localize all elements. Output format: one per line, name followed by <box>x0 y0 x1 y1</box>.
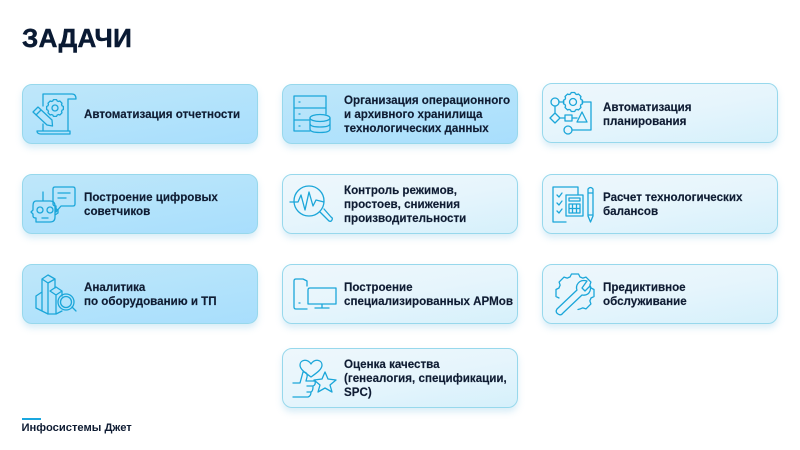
panel: predictive maintenance: обслуживание <box>603 295 687 308</box>
panel: reporting automation <box>22 84 258 144</box>
panel: planning automation: Автоматизация <box>603 101 692 114</box>
panel: data storage: и архивного хранилища <box>344 108 482 121</box>
panel: workstations <box>282 264 518 324</box>
panel: equipment analytics: по оборудованию и ТП <box>84 295 217 308</box>
panel: mode control: простоев, снижения <box>344 198 460 211</box>
panel: predictive maintenance <box>542 264 778 324</box>
panel: predictive maintenance: Предиктивное <box>603 281 686 294</box>
panel: digital advisors: Построение цифровых <box>84 191 218 204</box>
footer accent line <box>22 418 41 420</box>
panel: data storage: технологических данных <box>344 122 489 135</box>
panel: quality assessment: SPC) <box>344 386 372 399</box>
panel: quality assessment: (генеалогия, спецификации, <box>344 372 507 385</box>
panel: balance calculation: Расчет технологических <box>603 191 742 204</box>
panel: planning automation <box>542 83 778 143</box>
panel: workstations: Построение <box>344 281 413 294</box>
title: ЗАДАЧИ <box>22 23 132 53</box>
panel: mode control: производительности <box>344 212 466 225</box>
panel: workstations: специализированных АРМов <box>344 295 513 308</box>
panel: quality assessment: Оценка качества <box>344 358 440 371</box>
panel: planning automation: планирования <box>603 115 686 128</box>
panel: mode control: Контроль режимов, <box>344 184 457 197</box>
panel: mode control <box>282 174 518 234</box>
panel: reporting automation: Автоматизация отчетности <box>84 108 240 121</box>
panel: balance calculation <box>542 174 778 234</box>
panel: equipment analytics: Аналитика <box>84 281 145 294</box>
panel: digital advisors <box>22 174 258 234</box>
panel: equipment analytics <box>22 264 258 324</box>
footer brand: Инфосистемы Джет <box>22 422 132 434</box>
panel: data storage <box>282 84 518 144</box>
panel: quality assessment <box>282 348 518 408</box>
panel: data storage: Организация операционного <box>344 94 510 107</box>
panel: balance calculation: балансов <box>603 205 658 218</box>
panel: digital advisors: советчиков <box>84 205 150 218</box>
